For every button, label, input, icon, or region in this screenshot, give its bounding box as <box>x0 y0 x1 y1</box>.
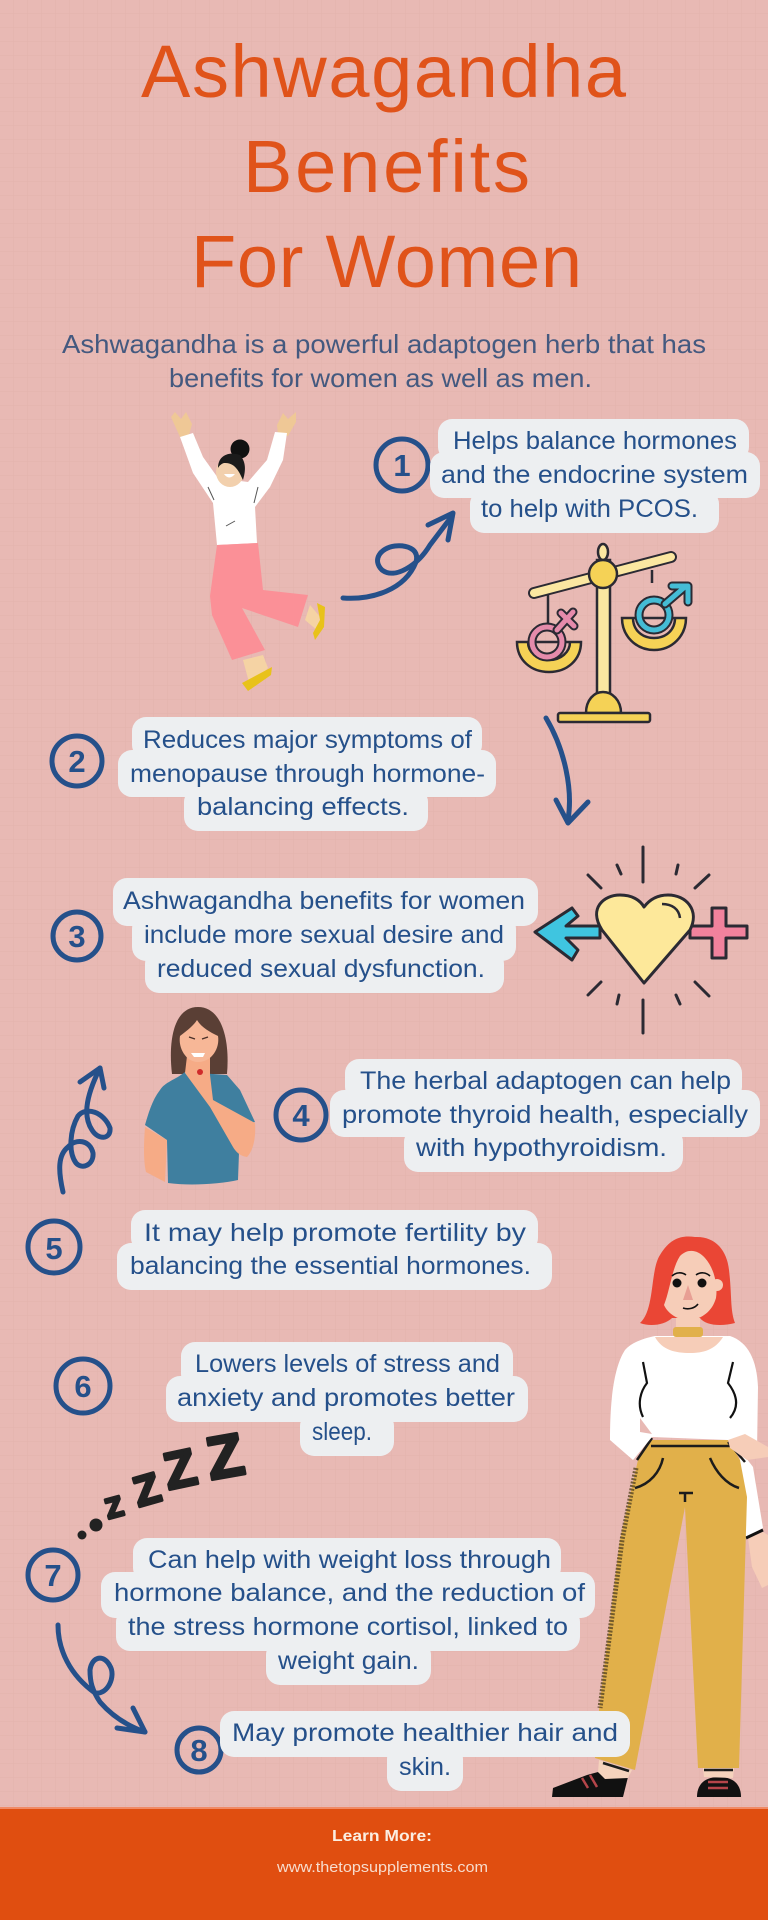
number 5 <box>28 1221 80 1273</box>
callout 8 text: May promote healthier hair and <box>232 1719 618 1747</box>
number 4: 4 <box>292 1098 310 1133</box>
illustration: jumping woman <box>171 412 325 691</box>
callout 3 text: reduced sexual dysfunction. <box>157 955 485 983</box>
number 1 <box>376 439 428 491</box>
icon: zzz sleep: Z <box>102 1490 126 1525</box>
callout 1 text: to help with PCOS. <box>481 495 698 523</box>
icon: zzz sleep: Z <box>159 1438 202 1502</box>
callout 4 text: The herbal adaptogen can help <box>360 1067 731 1095</box>
callout 4 text: with hypothyroidism. <box>415 1134 667 1162</box>
callout 4 <box>330 1059 760 1172</box>
footer url: www.thetopsupplements.com <box>276 1859 488 1876</box>
callout 2 text <box>130 726 485 821</box>
callout 3 text: Ashwagandha benefits for women <box>123 887 525 915</box>
callout 1 text: and the endocrine system <box>441 461 748 489</box>
callout 2 <box>118 717 496 831</box>
illustration: woman in yellow trousers <box>552 1236 768 1797</box>
callout 8 <box>220 1711 630 1791</box>
callout 5 <box>117 1210 552 1290</box>
number 7 <box>28 1550 78 1600</box>
icon: gender balance scale <box>517 544 688 722</box>
callout 1 <box>430 419 760 533</box>
number 7: 7 <box>44 1558 62 1593</box>
callout 6 text <box>177 1350 515 1446</box>
callout 1 text <box>441 427 748 523</box>
callout 4 text <box>342 1067 749 1162</box>
icon: zzz sleep: Z <box>128 1463 166 1516</box>
callout 7 text <box>114 1546 585 1675</box>
callout 3 text: include more sexual desire and <box>144 921 504 949</box>
number 4 <box>276 1090 326 1140</box>
callout 2 text: Reduces major symptoms of <box>143 726 472 754</box>
arrow 2 <box>546 718 588 823</box>
number 3 <box>53 912 101 960</box>
callout 7 text: the stress hormone cortisol, linked to <box>128 1613 568 1641</box>
title: Benefits <box>243 125 530 208</box>
number 1: 1 <box>393 448 411 483</box>
callout 6 <box>166 1342 528 1456</box>
callout 8 text: skin. <box>399 1753 451 1781</box>
callout 5 text: balancing the essential hormones. <box>130 1252 531 1280</box>
callout 2 text: menopause through hormone- <box>130 760 485 788</box>
number 2: 2 <box>68 744 86 779</box>
number 8: 8 <box>190 1733 208 1768</box>
intro text: Ashwagandha is a powerful adaptogen herb that has <box>62 329 706 359</box>
callout 7 text: Can help with weight loss through <box>148 1546 551 1574</box>
callout 7 <box>101 1538 595 1685</box>
footer heading: Learn More: <box>332 1828 432 1845</box>
callout 3 <box>113 878 538 993</box>
callout 8 text <box>232 1719 618 1781</box>
footer band <box>0 1807 768 1920</box>
callout 4 text: promote thyroid health, especially <box>342 1101 749 1129</box>
number 5: 5 <box>45 1231 63 1266</box>
intro text: benefits for women as well as men. <box>169 363 592 393</box>
intro text <box>62 329 706 393</box>
number 3: 3 <box>68 919 86 954</box>
title: For Women <box>191 220 582 303</box>
callout 1 text: Helps balance hormones <box>453 427 737 455</box>
arrow 4 <box>60 1068 110 1192</box>
number 8 <box>177 1728 221 1772</box>
callout 2 text: balancing effects. <box>197 793 409 821</box>
illustration: woman touching throat <box>144 1007 255 1184</box>
title <box>141 30 627 303</box>
number 6: 6 <box>74 1369 92 1404</box>
callout 6 text: Lowers levels of stress and <box>195 1350 500 1378</box>
callout 3 text <box>123 887 525 983</box>
callout 7 text: weight gain. <box>277 1647 419 1675</box>
number 6 <box>56 1359 110 1413</box>
callout 6 text: sleep. <box>312 1418 372 1446</box>
callout 7 text: hormone balance, and the reduction of <box>114 1579 585 1607</box>
callout 5 text <box>130 1219 531 1280</box>
icon: heart with gender arrows <box>535 847 747 1033</box>
callout 5 text: It may help promote fertility by <box>144 1219 527 1247</box>
title: Ashwagandha <box>141 30 627 113</box>
callout 6 text: anxiety and promotes better <box>177 1384 515 1412</box>
arrow 7 <box>58 1625 145 1732</box>
icon: zzz sleep: Z <box>201 1420 249 1493</box>
number 2 <box>52 736 102 786</box>
arrow 1 <box>343 513 453 598</box>
icon: zzz sleep <box>78 1420 249 1540</box>
